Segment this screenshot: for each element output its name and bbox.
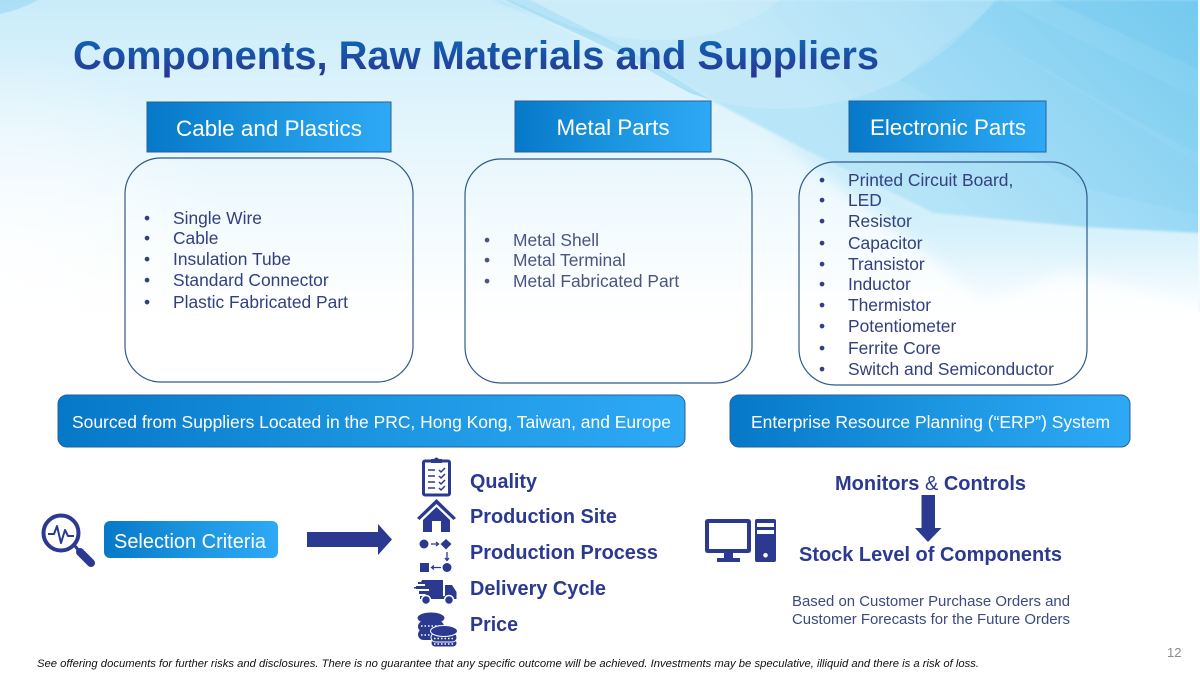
list: electronic parts items [799,162,1087,385]
list: cable and plastics items: Plastic Fabricated Part [173,292,348,312]
icon: clipboard [424,458,450,495]
panel: cable and plastics [125,102,413,382]
list: cable and plastics items: • [144,228,150,248]
header: electronic parts [849,101,1046,152]
list: electronic parts items: Switch and Semiconductor [848,359,1054,379]
list: cable and plastics items: Single Wire [173,208,262,228]
list: electronic parts items: • [819,170,825,190]
list: metal parts items [465,159,752,383]
list: cable and plastics items: Standard Connector [173,270,329,290]
list: cable and plastics items: • [144,208,150,228]
list: electronic parts items: • [819,338,825,358]
list: metal parts items: • [484,230,490,250]
list: metal parts items: Metal Terminal [513,250,626,270]
icon: process flow [420,539,452,572]
text: stock level basis: Customer Forecasts for the Future Orders [792,611,1070,628]
panel: metal parts [465,101,752,383]
list: electronic parts items: Potentiometer [848,316,956,336]
list: electronic parts items: Resistor [848,211,912,231]
list: electronic parts items: • [819,254,825,274]
page number: 12 [1167,645,1181,660]
header: metal parts: Metal Parts [556,115,670,140]
list: cable and plastics items: Cable [173,228,218,248]
list: electronic parts items: • [819,359,825,379]
header: cable and plastics: Cable and Plastics [176,116,362,141]
list: electronic parts items: • [819,233,825,253]
selection criteria label [104,521,278,558]
list: electronic parts items: Capacitor [848,233,923,253]
background waves [0,0,1200,320]
list: electronic parts items: Transistor [848,254,925,274]
list: cable and plastics items: • [144,249,150,269]
title: Components, Raw Materials and Suppliers [73,34,879,78]
list: electronic parts items: Printed Circuit Board, [848,170,1013,190]
list: electronic parts items: • [819,211,825,231]
criterion: price: Price [470,614,518,636]
icon: magnifying glass [44,516,91,563]
header: metal parts [515,101,711,152]
panel: electronic parts [799,101,1087,385]
list: electronic parts items: • [819,295,825,315]
list: electronic parts items: • [819,316,825,336]
footnote: See offering documents for further risks and disclosures. There is no guarantee that any specific outcome will be achieved. Investments may be speculative, illiquid and there is a risk of loss. [37,658,979,670]
list: electronic parts items: LED [848,190,882,210]
header: electronic parts: Electronic Parts [870,115,1026,140]
criterion: production site: Production Site [470,506,617,528]
list: electronic parts items: • [819,274,825,294]
list: cable and plastics items: • [144,270,150,290]
criterion: delivery cycle: Delivery Cycle [470,578,606,600]
icon: computer [705,519,776,562]
list: cable and plastics items [125,158,413,382]
list: electronic parts items: Thermistor [848,295,931,315]
text: stock level basis: Based on Customer Purchase Orders and [792,593,1070,610]
list: electronic parts items: Ferrite Core [848,338,941,358]
list: cable and plastics items: Insulation Tube [173,249,291,269]
selection criteria label: Selection Criteria [114,531,267,553]
criterion: quality: Quality [470,471,538,493]
arrow: selection to criteria [307,524,392,555]
list: metal parts items: • [484,250,490,270]
banner: suppliers: Sourced from Suppliers Located in the PRC, Hong Kong, Taiwan, and Europe [72,412,671,432]
text: stock level basis [792,593,1070,628]
list: cable and plastics items: • [144,292,150,312]
icon: house [417,499,456,532]
criterion: production process: Production Process [470,542,658,564]
banner: suppliers [58,395,685,447]
list: electronic parts items: • [819,190,825,210]
list: metal parts items: • [484,271,490,291]
icon: coins [418,612,458,647]
heading: stock level of components: Stock Level of Components [799,544,1062,566]
header: cable and plastics [147,102,391,152]
heading: monitors and controls: Monitors & Controls [835,473,1026,495]
banner: ERP system [730,395,1130,447]
arrow: monitors to stock level [915,495,942,542]
banner: ERP system: Enterprise Resource Planning (“ERP”) System [751,412,1110,432]
icon: delivery truck [414,580,456,604]
list: metal parts items: Metal Shell [513,230,599,250]
list: metal parts items: Metal Fabricated Part [513,271,679,291]
list: electronic parts items: Inductor [848,274,911,294]
